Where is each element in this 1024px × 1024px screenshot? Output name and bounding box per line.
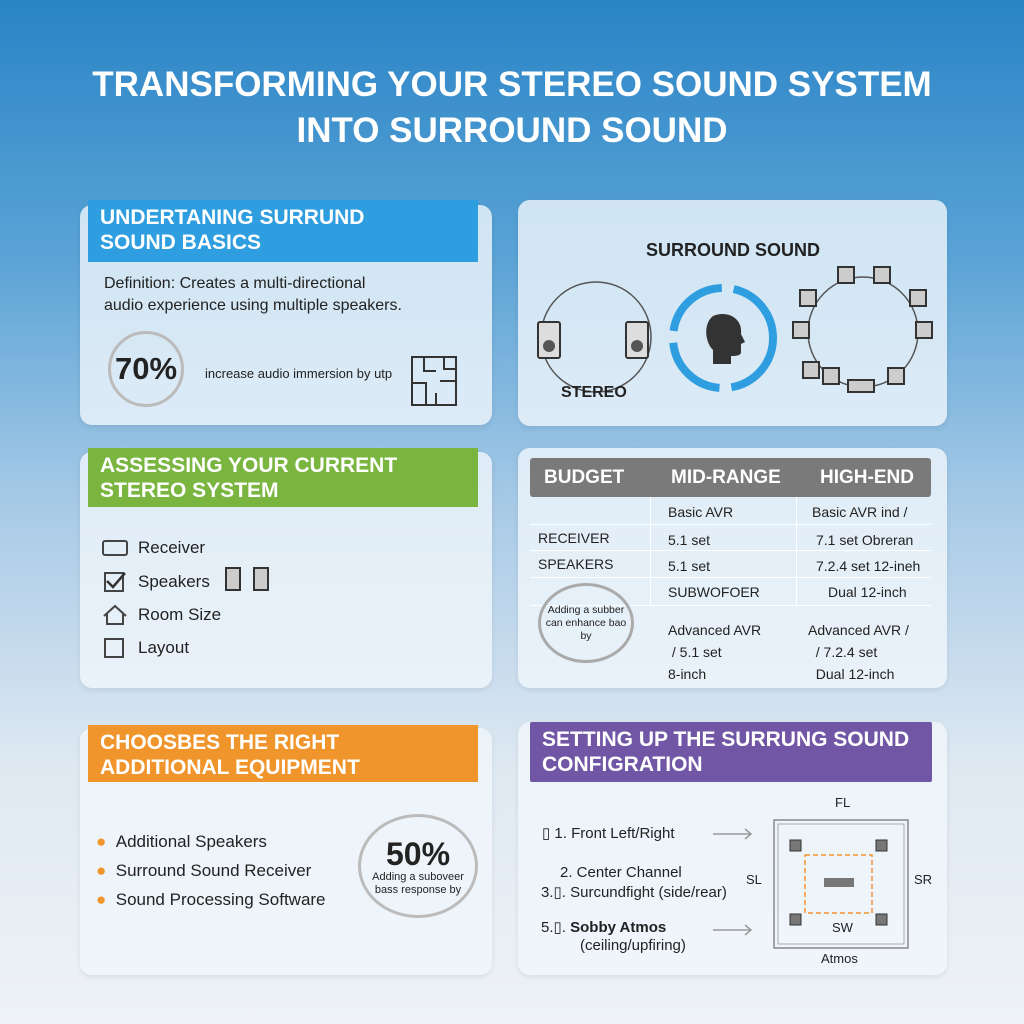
heading: assessing: STEREO SYSTEM [100, 479, 279, 502]
heading: choosing: ADDITIONAL EQUIPMENT [100, 756, 360, 779]
callout circle: by [580, 630, 592, 642]
stat circle 70% [108, 331, 184, 407]
table body: RECEIVER [538, 530, 610, 546]
stat circle 50%: 50% [386, 836, 450, 872]
table body: 5.1 set [668, 532, 710, 548]
table body: 8-inch [668, 666, 706, 682]
stat circle 50%: Adding a suboveer [372, 871, 464, 883]
speaker list: 2. Center Channel [560, 864, 682, 881]
stat text: increase audio immersion by utp [205, 366, 392, 381]
table body: / 5.1 set [672, 644, 722, 660]
checklist: Room Size [138, 605, 221, 624]
panel: basics [80, 205, 492, 425]
room diagram: SW [832, 920, 853, 935]
heading: setup: CONFIGRATION [542, 753, 703, 776]
checklist: Speakers [138, 572, 210, 591]
speaker list: (ceiling/upfiring) [580, 937, 686, 954]
heading: assessing [88, 448, 478, 507]
callout circle: Adding a subber [548, 604, 624, 616]
arrows [713, 828, 752, 936]
speaker list: ▯ 1. Front Left/Right [542, 825, 674, 842]
table body [530, 497, 931, 682]
room diagram: SR [914, 872, 932, 887]
title: INTO SURROUND SOUND [296, 111, 728, 150]
table header: HIGH-END [820, 467, 914, 488]
definition text: Definition: Creates a multi-directional [104, 275, 365, 292]
table body: 7.1 set Obreran [816, 532, 913, 548]
heading: basics: UNDERTANING SURRUND [100, 206, 364, 229]
heading: setup: SETTING UP THE SURRUNG SOUND [542, 728, 909, 751]
bullet list: ● Additional Speakers [96, 832, 267, 851]
heading: basics [88, 200, 478, 262]
table body: / 7.2.4 set [816, 644, 877, 660]
table header: MID-RANGE [671, 467, 781, 488]
table body: Dual 12-inch [816, 666, 894, 682]
bullet list: ● Sound Processing Software [96, 890, 326, 909]
table body: Basic AVR [668, 504, 733, 520]
room diagram [746, 795, 932, 966]
table body: Basic AVR ind / [812, 504, 907, 520]
speaker list [541, 825, 727, 954]
heading: assessing: ASSESSING YOUR CURRENT [100, 454, 397, 477]
panel: setup [518, 722, 947, 975]
heading: basics: SOUND BASICS [100, 231, 261, 254]
panel: assessing [80, 452, 492, 688]
panel: setup: SL [746, 872, 762, 887]
stat circle 50% [358, 814, 478, 918]
checklist [102, 538, 269, 658]
table body: SPEAKERS [538, 556, 613, 572]
stereo diagram [537, 281, 652, 393]
heading: choosing: CHOOSBES THE RIGHT [100, 731, 339, 754]
icon: head with arrows [669, 284, 777, 392]
bullet list: ● Surround Sound Receiver [96, 861, 311, 880]
panel: equipment table [518, 448, 947, 688]
callout circle [538, 583, 634, 663]
panel: choosing equipment [80, 728, 492, 975]
room diagram: Atmos [821, 951, 858, 966]
table body: 7.2.4 set 12-ineh [816, 558, 920, 574]
speaker list: 5.▯. Sobby Atmos [541, 919, 666, 936]
bullet list [96, 832, 326, 909]
table header: BUDGET [544, 467, 624, 488]
table body: SUBWOFOER [668, 584, 760, 600]
title [92, 65, 932, 150]
stat circle 50%: bass response by [375, 884, 461, 896]
title: TRANSFORMING YOUR STEREO SOUND SYSTEM [92, 65, 932, 104]
room diagram: FL [835, 795, 850, 810]
callout circle: can enhance bao [546, 617, 626, 629]
table body: Advanced AVR / [808, 622, 909, 638]
heading: choosing [88, 725, 478, 782]
table body: Dual 12-inch [828, 584, 907, 600]
definition text: audio experience using multiple speakers. [104, 297, 402, 314]
checklist: Receiver [138, 538, 205, 557]
checklist: Layout [138, 638, 189, 657]
table header [530, 458, 931, 497]
stat circle 70%: 70% [115, 351, 177, 386]
heading: setup [530, 722, 932, 782]
table body: Advanced AVR [668, 622, 761, 638]
definition text [104, 275, 402, 314]
stereo label: STEREO [561, 384, 627, 401]
speaker list: 3.▯. Surcundfight (side/rear) [541, 884, 727, 901]
table body: 5.1 set [668, 558, 710, 574]
heading: surround sound: SURROUND SOUND [646, 240, 820, 260]
icon: floor plan [411, 356, 457, 406]
panel: stereo vs surround [518, 200, 947, 426]
surround diagram [792, 266, 933, 393]
